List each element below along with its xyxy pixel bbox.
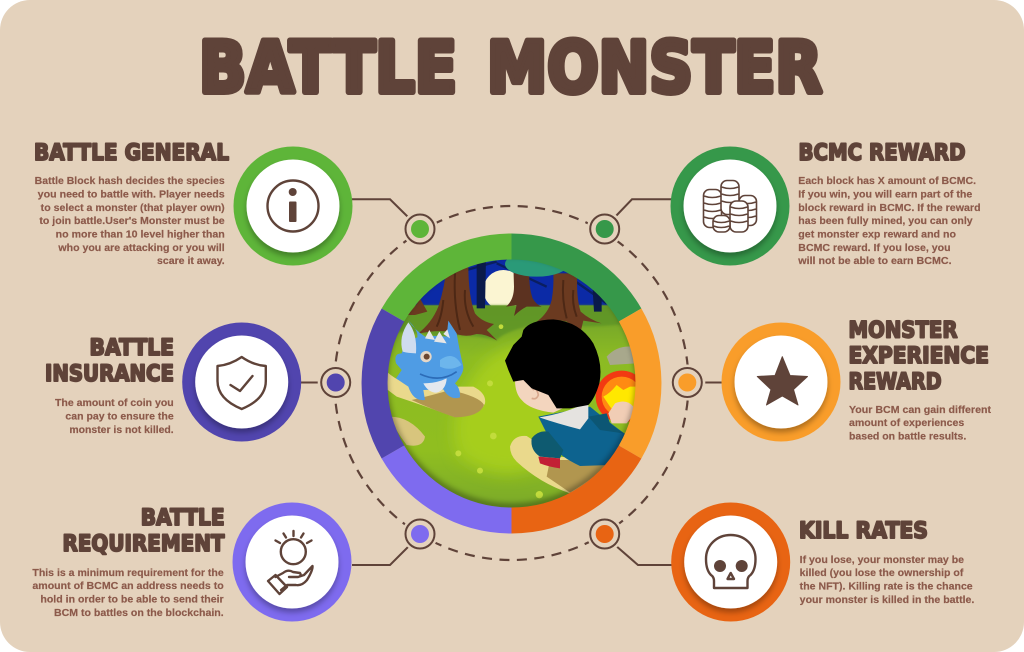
text: bcmc reward: block reward in BCMC. If the reward [798, 203, 981, 214]
text: battle general: Battle Block hash decides the species [35, 176, 225, 187]
fireball [596, 370, 636, 422]
heading: monster experience reward: EXPERIENCE [848, 343, 989, 369]
text: battle general: no more than 10 level higher than [56, 230, 225, 240]
inner shadow of ring [388, 280, 636, 508]
text: kill rates: the NFT). Killing rate is the chance [800, 582, 973, 592]
title: MONSTER [487, 27, 822, 109]
text: battle requirement [32, 568, 224, 619]
text: battle requirement: This is a minimum requirement for the [32, 568, 224, 579]
text: kill rates: If you lose, your monster may be [800, 555, 964, 566]
heading: battle insurance [45, 335, 174, 387]
panel: kill rates [671, 502, 975, 622]
heading: battle general: BATTLE GENERAL [34, 140, 229, 166]
text: bcmc reward [797, 176, 981, 267]
canopy [505, 260, 564, 277]
text: battle insurance: monster is not killed. [69, 425, 174, 436]
heading: kill rates: KILL RATES [799, 518, 928, 544]
heading: monster experience reward: REWARD [848, 369, 942, 395]
node: monster experience reward [669, 364, 705, 400]
central game scene [388, 260, 636, 508]
text: monster experience reward [849, 405, 992, 442]
panel: battle requirement [32, 502, 352, 622]
node: kill rates [587, 516, 623, 552]
text: monster experience reward: amount of experiences [849, 418, 965, 429]
boy [505, 319, 633, 468]
text: battle general: who you are attacking or you will [57, 243, 225, 254]
text: bcmc reward: Each block has X amount of BCMC. [798, 176, 976, 187]
panel: battle insurance [45, 322, 301, 442]
connector lines [301, 199, 722, 565]
hole left [388, 372, 486, 417]
text: monster experience reward: based on battle results. [849, 432, 967, 442]
node: battle general [402, 211, 438, 247]
text: battle general: scare it away. [157, 256, 225, 267]
icon: coins [670, 146, 790, 266]
grass dots [455, 324, 543, 498]
text: battle general: to select a monster (that player own) [41, 203, 225, 214]
heading: monster experience reward [848, 318, 989, 395]
text: bcmc reward: get monster exp reward and no [798, 230, 956, 240]
text: bcmc reward: will not be able to earn BCMC. [797, 256, 952, 267]
text: kill rates [800, 555, 975, 606]
moon [485, 270, 516, 306]
heading: battle requirement: BATTLE [141, 505, 225, 531]
heading: battle insurance: INSURANCE [45, 361, 174, 387]
panel: battle general [34, 140, 352, 267]
grass [383, 305, 640, 513]
text: battle requirement: hold in order to be able to send their [40, 594, 224, 606]
node: bcmc reward [587, 211, 623, 247]
heading: monster experience reward: MONSTER [848, 318, 958, 344]
dashed orbit ring [334, 206, 688, 560]
node: battle requirement [402, 516, 438, 552]
text: battle requirement: amount of BCMC an address needs to [32, 581, 224, 592]
background tree trunks [477, 258, 486, 308]
icon: skull [671, 502, 790, 622]
title: BATTLE [199, 27, 457, 109]
text: bcmc reward: has been fully mined, you can only [798, 216, 973, 227]
hole right [510, 436, 590, 493]
segmented colour ring [375, 246, 648, 520]
text: kill rates: killed (you lose the ownership of [800, 568, 964, 579]
text: kill rates: your monster is killed in the battle. [800, 595, 975, 606]
heading: bcmc reward: BCMC REWARD [798, 140, 966, 166]
text: battle insurance [55, 398, 174, 436]
panel: bcmc reward [670, 140, 981, 267]
panel: monster experience reward [722, 318, 992, 442]
node: battle insurance [318, 364, 354, 400]
text: monster experience reward: Your BCM can gain different [849, 405, 992, 416]
text: bcmc reward: BCMC reward. If you lose, you [798, 243, 951, 254]
text: battle general [35, 176, 225, 267]
heading: battle requirement: REQUIREMENT [62, 531, 225, 557]
icon: info [234, 146, 352, 266]
text: battle general: you need to battle with. Player needs [38, 190, 225, 200]
heading: battle insurance: BATTLE [90, 335, 174, 361]
title [199, 27, 822, 109]
icon: star [722, 322, 840, 442]
text: bcmc reward: If you win, you will earn part of the [798, 190, 973, 200]
heading: battle requirement [62, 505, 225, 557]
text: battle insurance: can pay to ensure the [65, 412, 174, 422]
text: battle general: to join battle.User's Monster must be [39, 216, 225, 227]
text: battle requirement: BCM to battles on the blockchain. [54, 608, 224, 619]
icon: shield [182, 322, 301, 442]
text: battle insurance: The amount of coin you [55, 398, 174, 409]
dragon [395, 321, 463, 400]
icon: hand holding coin [232, 502, 352, 622]
